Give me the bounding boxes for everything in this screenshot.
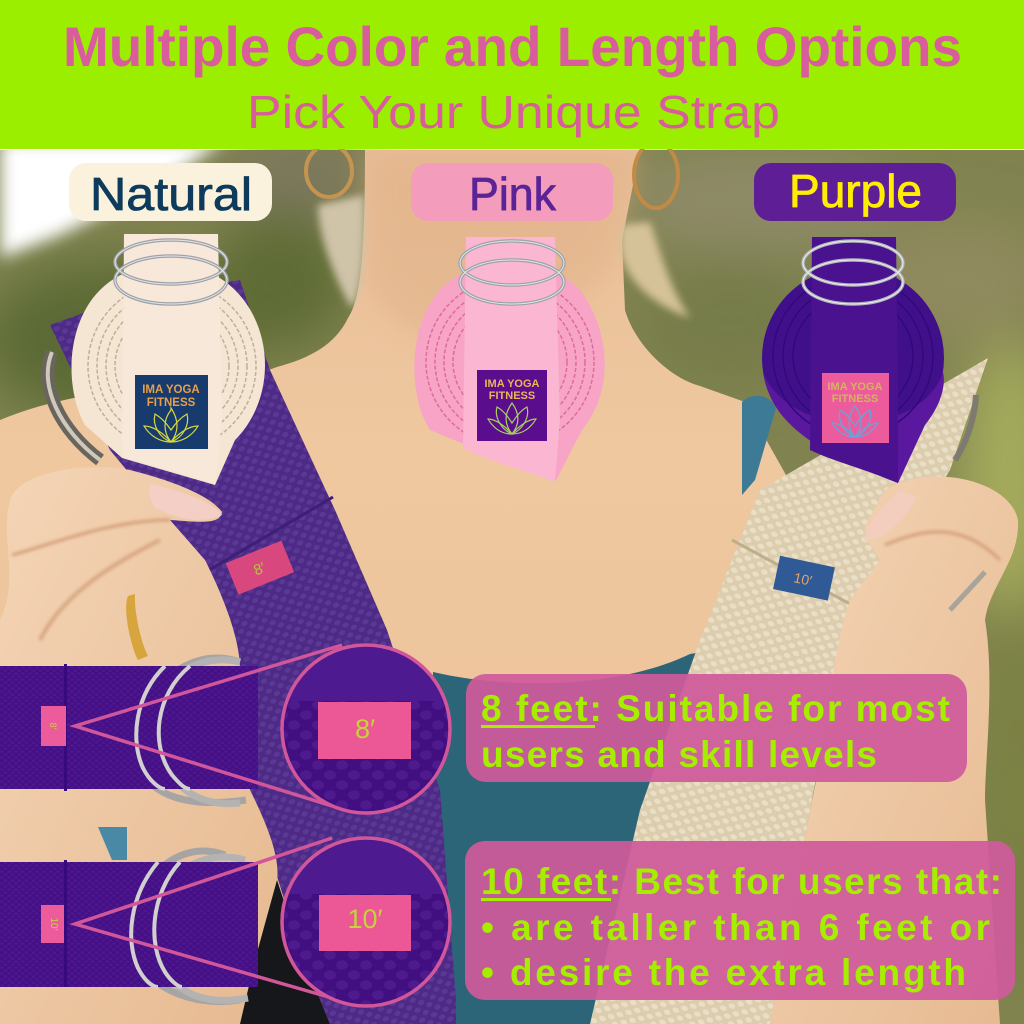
small 10 foot tag	[41, 905, 64, 943]
pink strap brand tag: FITNESS	[489, 390, 535, 402]
pink strap brand tag	[477, 370, 547, 441]
text panel: 10 feet: • are taller than 6 feet or	[481, 907, 990, 948]
natural coiled strap product	[71, 234, 265, 485]
pink coiled strap product	[414, 237, 605, 482]
magnified circle: 10 foot tag: 10′	[347, 904, 383, 934]
size tag 10 feet on natural strap: 10′	[792, 569, 814, 589]
text panel: 8 feet	[466, 674, 967, 782]
label: Pink: Pink	[469, 168, 557, 220]
metal buckle on right strap	[955, 395, 976, 460]
text panel: 10 feet: 10 feet: Best for users that:	[481, 861, 1002, 902]
purple strap brand tag	[822, 373, 889, 443]
text panel: 8 feet: 8 feet: Suitable for most	[481, 688, 950, 729]
magnified circle: 8 foot tag	[282, 645, 450, 813]
purple strap held in left hand	[50, 280, 456, 1024]
inset photo: 8 foot strap with D-rings	[0, 658, 258, 804]
header banner	[0, 0, 1024, 149]
magnified circle: 10 foot tag	[282, 838, 450, 1006]
small 10 foot tag: 10′	[48, 918, 59, 931]
label: Pink	[411, 163, 613, 221]
size tag 10 feet on natural strap	[773, 556, 835, 601]
inset photo: 10 foot strap with D-rings	[0, 851, 258, 1002]
magnified circle: 8 foot tag: 8′	[355, 714, 375, 744]
natural strap brand tag: IMA YOGA	[142, 384, 200, 396]
label: Purple	[754, 163, 956, 221]
size tag 8 feet on purple strap	[226, 541, 294, 595]
natural strap brand tag: FITNESS	[147, 397, 196, 409]
text panel: 10 feet	[465, 841, 1015, 1000]
woman: torso, neck and shoulders	[0, 150, 800, 1024]
label: Natural	[69, 163, 272, 221]
teal tank top	[420, 396, 776, 1024]
pink strap brand tag: IMA YOGA	[484, 378, 540, 390]
metal buckle on left strap	[48, 352, 100, 460]
small 8 foot tag	[41, 706, 66, 746]
natural strap brand tag	[135, 375, 208, 449]
purple strap brand tag: FITNESS	[832, 393, 878, 405]
label: Natural: Natural	[90, 168, 252, 220]
text panel: 10 feet: • desire the extra length	[481, 952, 966, 993]
earring right	[634, 142, 678, 208]
purple strap brand tag: IMA YOGA	[827, 381, 883, 393]
small 8 foot tag: 8′	[48, 723, 58, 730]
size tag 8 feet on purple strap: 8′	[251, 559, 268, 579]
purple coiled strap product	[762, 237, 944, 483]
left hand holding strap	[0, 467, 278, 1024]
right hand holding strap	[770, 476, 1018, 1024]
strap fold lines	[204, 497, 850, 604]
subtitle: Pick Your Unique Strap	[247, 86, 780, 138]
natural strap held in right hand	[590, 358, 988, 1024]
label: Purple: Purple	[789, 165, 922, 217]
text panel: 8 feet: users and skill levels	[481, 734, 877, 775]
callout lines for 8 foot tag	[75, 645, 342, 806]
black garment bottom	[240, 880, 330, 1024]
callout lines for 10 foot tag	[75, 838, 332, 998]
earring left	[306, 145, 352, 197]
title: Multiple Color and Length Options	[63, 15, 962, 78]
